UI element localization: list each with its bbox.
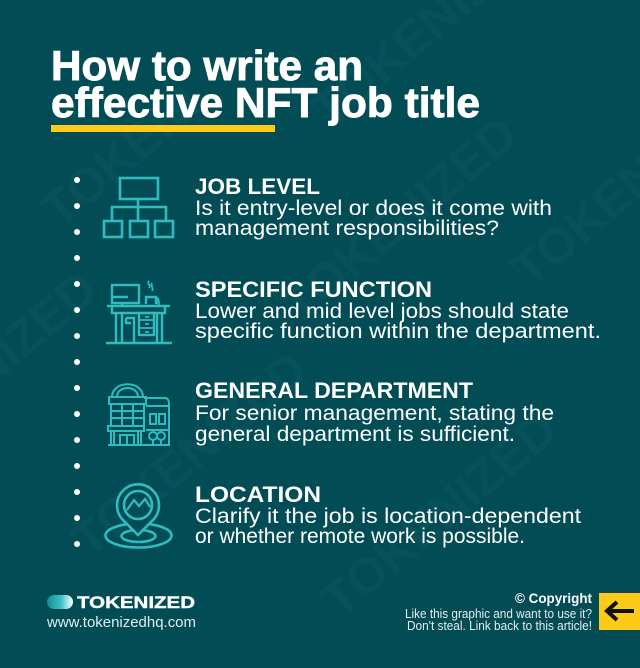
title: effective NFT job title	[51, 79, 480, 126]
icon: office desk	[106, 281, 172, 343]
section: specific function: SPECIFIC FUNCTION	[195, 277, 432, 302]
footer logo: TOKENIZED	[77, 593, 195, 612]
section: location	[195, 482, 581, 548]
copyright note	[405, 590, 592, 633]
section: job level: JOB LEVEL	[195, 174, 320, 199]
copyright note: Like this graphic and want to use it?	[405, 606, 592, 621]
infographic canvas: TOKENIZED	[61, 340, 318, 568]
infographic canvas: TOKENI	[31, 75, 211, 238]
section: general department	[195, 378, 554, 446]
section: job level: Is it entry-level or does it come with	[195, 197, 552, 220]
copyright note: Don't steal. Link back to this article!	[407, 618, 592, 633]
title underline	[51, 125, 275, 132]
infographic canvas: TOKENIZED	[271, 105, 528, 333]
section: general department: For senior management, stating the	[195, 402, 554, 425]
section: general department: general department is sufficient.	[195, 423, 515, 446]
icon: location pin	[106, 484, 172, 548]
dotted timeline	[74, 177, 80, 547]
copyright note: © Copyright	[515, 590, 592, 606]
section: job level	[195, 174, 552, 240]
section: job level: management responsibilities?	[195, 217, 499, 240]
section: specific function	[195, 277, 601, 343]
section: specific function: Lower and mid level jobs should state	[195, 300, 569, 323]
section: location: or whether remote work is possible.	[195, 525, 525, 548]
footer website: www.tokenizedhq.com	[46, 614, 196, 631]
section: location: Clarify it the job is location-dependent	[195, 505, 581, 528]
footer logo	[47, 593, 195, 612]
title: How to write an	[51, 42, 363, 89]
section: general department: GENERAL DEPARTMENT	[195, 378, 474, 403]
icon: building	[108, 384, 169, 445]
back arrow button	[599, 593, 640, 630]
title	[51, 42, 480, 126]
icon: org chart	[104, 178, 173, 237]
infographic canvas: TOKENIZED	[311, 400, 568, 628]
section: location: LOCATION	[195, 482, 321, 507]
section: specific function: specific function within the department.	[195, 320, 601, 343]
